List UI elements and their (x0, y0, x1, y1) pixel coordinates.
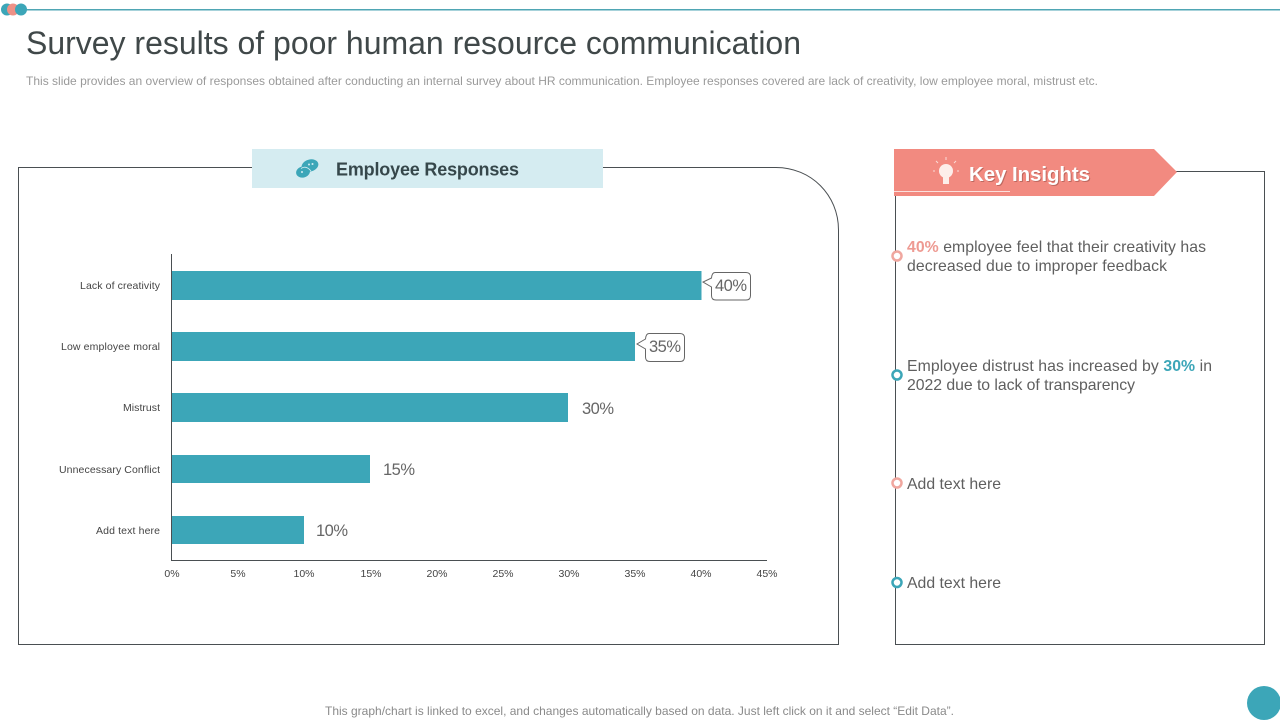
marker (892, 478, 902, 488)
x axis labels: 20% (426, 568, 448, 580)
data labels (316, 400, 614, 540)
insight 1 (892, 239, 1210, 275)
marker (892, 370, 902, 380)
insight 2: 2022 due to lack of transparency (907, 377, 1135, 394)
x axis labels: 5% (230, 568, 246, 580)
x axis labels: 10% (293, 568, 315, 580)
category labels: Unnecessary Conflict (59, 464, 160, 476)
data labels: 10% (316, 522, 348, 540)
panel heading (252, 149, 603, 188)
callout: 35% (637, 334, 684, 362)
x axis labels: 0% (164, 568, 180, 580)
data labels: 15% (383, 461, 415, 479)
insight 1: 40% employee feel that their creativity has (907, 239, 1206, 256)
x axis labels: 40% (690, 568, 712, 580)
category labels: Low employee moral (61, 341, 160, 353)
marker (892, 578, 902, 587)
x axis labels: 15% (360, 568, 382, 580)
category labels (59, 280, 161, 537)
panel outline (896, 172, 1264, 644)
callout: 40%: 40% (715, 277, 747, 295)
top decoration (1, 4, 1280, 16)
category labels: Lack of creativity (80, 280, 161, 292)
data labels: 30% (582, 400, 614, 418)
heading text shadow: Key Insights (970, 164, 1091, 187)
category labels: Mistrust (123, 402, 160, 414)
x axis labels: 35% (624, 568, 646, 580)
panel heading: Employee Responses (336, 160, 519, 180)
bars (172, 271, 702, 544)
insight 3: Add text here (907, 476, 1001, 493)
subtitle: This slide provides an overview of responses obtained after conducting an internal survey about HR communication. Employee responses covered are lack of creativity, low employee moral, mistrust etc. (26, 74, 1098, 88)
callout: 35%: 35% (649, 338, 681, 356)
callout: 40% (703, 272, 750, 300)
panel outline (18, 168, 838, 644)
insight 4: Add text here (907, 575, 1001, 592)
marker (892, 252, 902, 260)
axes (171, 254, 767, 560)
heading ribbon (894, 149, 1177, 196)
page number circle (1247, 686, 1280, 720)
x axis labels (164, 568, 778, 580)
insight 2 (892, 358, 1216, 394)
footer note: This graph/chart is linked to excel, and changes automatically based on data. Just left click on it and select “Edit Data”. (325, 704, 954, 718)
icon: light bulb (933, 157, 959, 184)
insight 1: decreased due to improper feedback (907, 258, 1167, 275)
x axis labels: 45% (756, 568, 778, 580)
panel: key insights (892, 149, 1264, 644)
category labels: Add text here (96, 525, 160, 537)
bar chart (59, 254, 778, 580)
panel: employee responses (18, 149, 838, 644)
x axis labels: 25% (492, 568, 514, 580)
icon: speech bubbles (295, 158, 320, 179)
heading text: Key Insights (969, 163, 1090, 186)
insight 2: Employee distrust has increased by 30% in (907, 358, 1212, 375)
x axis labels: 30% (558, 568, 580, 580)
title: Survey results of poor human resource communication (26, 25, 801, 61)
